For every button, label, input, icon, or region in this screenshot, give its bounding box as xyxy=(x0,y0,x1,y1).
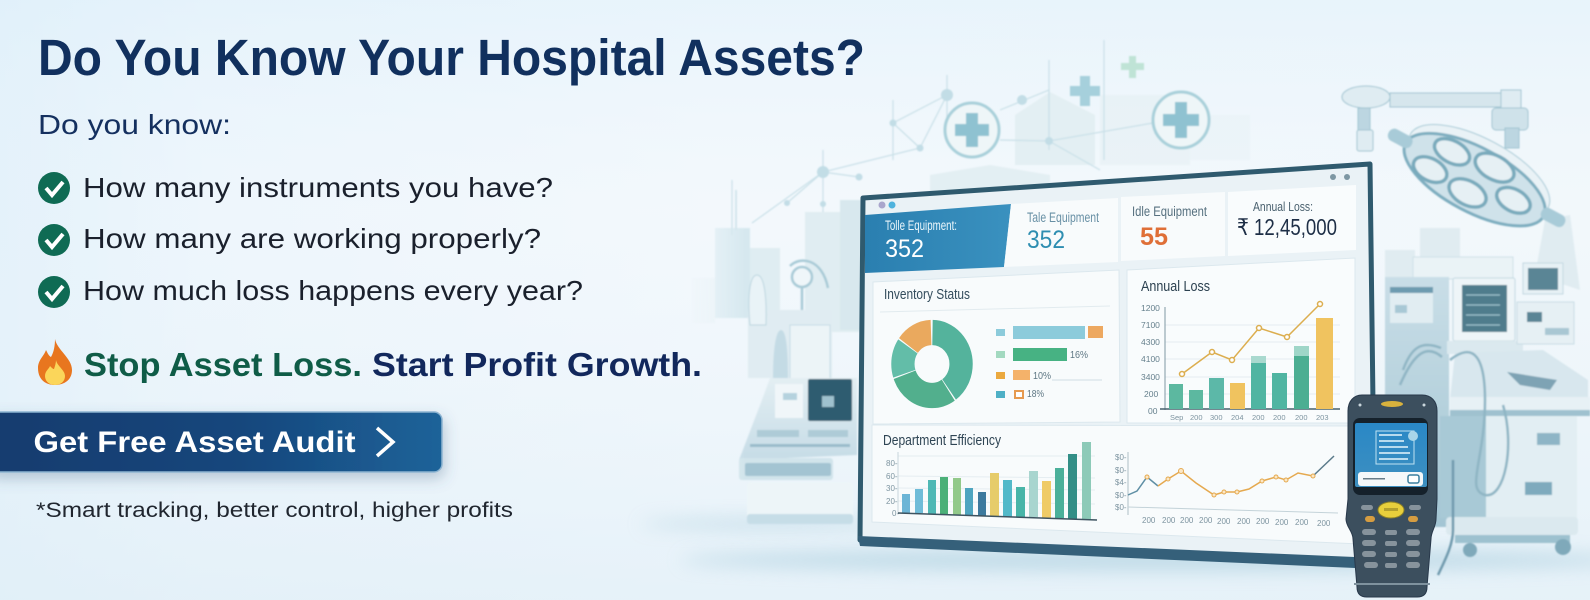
hospital silhouettes xyxy=(930,92,1250,200)
heading: Annual Loss xyxy=(1141,278,1210,295)
year labels: 300 xyxy=(1210,413,1223,422)
axis labels xyxy=(1141,303,1160,416)
line chart: 200 xyxy=(1199,516,1213,525)
axis labels: 4300 xyxy=(1141,337,1160,347)
donut chart xyxy=(903,332,961,396)
line chart: 200 xyxy=(1237,517,1251,526)
main monitor xyxy=(1453,278,1515,341)
line chart: $0- xyxy=(1115,503,1127,512)
dashboard monitor xyxy=(858,164,1378,569)
yellow scan button xyxy=(1378,502,1404,518)
checklist item 2: How many are working properly? xyxy=(83,223,541,254)
axis labels: 0- xyxy=(892,509,899,518)
legend bars xyxy=(996,326,1103,400)
bar chart xyxy=(1169,318,1333,409)
title: Do You Know Your Hospital Assets? xyxy=(38,29,865,86)
year labels xyxy=(1170,413,1329,422)
panel: inventory status xyxy=(873,270,1120,424)
stat card: annual loss xyxy=(1228,185,1356,256)
axis labels: 30- xyxy=(886,484,898,493)
screen xyxy=(1353,418,1428,495)
line chart: $0- xyxy=(1115,491,1127,500)
subheading: Do you know: xyxy=(38,109,231,140)
tagline xyxy=(84,346,702,383)
year labels: 200 xyxy=(1252,413,1265,422)
panel: annual loss xyxy=(1127,258,1355,423)
line chart: 200 xyxy=(1256,517,1270,526)
axis labels: 00 xyxy=(1148,406,1158,416)
year labels: 200 xyxy=(1190,413,1203,422)
tagline: Start Profit Growth. xyxy=(372,346,702,383)
equipment behind device xyxy=(748,310,832,378)
button: get free asset audit: Get Free Asset Audit xyxy=(34,426,356,459)
cart xyxy=(1440,416,1577,518)
line chart xyxy=(1115,452,1338,528)
year labels: 203 xyxy=(1316,413,1329,422)
monitor bezel xyxy=(860,164,1375,563)
axis labels xyxy=(886,459,899,518)
heading: Department Efficiency xyxy=(883,432,1001,449)
surgical lamp head xyxy=(1373,97,1583,255)
line chart: $0- xyxy=(1115,466,1127,475)
surgical lamp arm xyxy=(1342,86,1528,151)
scan trigger xyxy=(1381,401,1403,407)
right medical equipment xyxy=(1342,86,1590,575)
line chart: $0- xyxy=(1115,453,1127,462)
heading: Inventory Status xyxy=(884,287,970,303)
city silhouette right xyxy=(1385,215,1580,290)
line chart: 200 xyxy=(1142,516,1156,525)
axis labels: 4100 xyxy=(1141,354,1160,364)
icon: small green plus xyxy=(1121,56,1144,78)
stat card: idle equipment: Idle Equipment xyxy=(1132,204,1207,219)
axis labels: 7100 xyxy=(1141,320,1160,330)
icon: chevron xyxy=(377,428,393,456)
axis labels: 60- xyxy=(886,472,898,481)
stat card: total equipment highlighted: Tolle Equipment: xyxy=(885,218,957,233)
line chart: $4- xyxy=(1115,478,1127,487)
city and left medical device xyxy=(715,190,860,524)
legend bars: 18% xyxy=(1027,389,1044,400)
keypad xyxy=(1361,505,1421,568)
bar chart xyxy=(902,442,1091,519)
axis labels: 3400 xyxy=(1141,372,1160,382)
stat card: idle equipment: 55 xyxy=(1140,223,1168,251)
line chart: 200 xyxy=(1180,516,1194,525)
icon: small plus xyxy=(1070,76,1100,106)
checklist item 3: How much loss happens every year? xyxy=(83,275,583,306)
year labels: Sep xyxy=(1170,413,1183,422)
stat card: annual loss: Annual Loss: xyxy=(1253,199,1313,214)
tagline: Stop Asset Loss. xyxy=(84,346,362,383)
legend bars: 10% xyxy=(1033,371,1051,382)
line chart: 200 xyxy=(1275,518,1289,527)
line chart: 200 xyxy=(1317,519,1331,528)
year labels: 200 xyxy=(1273,413,1286,422)
left buildings xyxy=(715,190,860,332)
left device xyxy=(739,378,857,524)
stat card: idle equipment xyxy=(1121,192,1225,261)
stat card: annual loss: ₹ 12,45,000 xyxy=(1237,214,1337,240)
anesthesia machine body xyxy=(1385,257,1590,575)
icon: flame xyxy=(38,339,72,385)
line chart: 200 xyxy=(1162,516,1176,525)
axis labels: 200 xyxy=(1144,389,1158,399)
stat card: total equipment: 352 xyxy=(1027,226,1065,254)
monitor bottom edge xyxy=(858,536,1378,569)
line series xyxy=(1180,302,1322,376)
small top monitor xyxy=(1523,263,1563,294)
stat card: total equipment highlighted: 352 xyxy=(885,235,924,263)
stat card: total equipment: Tale Equipment xyxy=(1027,210,1099,225)
window dots xyxy=(878,174,1350,208)
checklist item 1: How many instruments you have? xyxy=(83,172,553,203)
icon: plus ring left xyxy=(945,103,999,157)
axis labels: 1200 xyxy=(1141,303,1160,313)
footnote: *Smart tracking, better control, higher profits xyxy=(36,498,513,522)
axis labels: 20- xyxy=(886,497,898,506)
icon: handheld barcode scanner xyxy=(1346,395,1437,597)
cables xyxy=(1400,345,1508,495)
checklist xyxy=(38,172,583,308)
stat card: total equipment highlighted xyxy=(865,204,1011,273)
icon: plus ring right xyxy=(1153,92,1209,148)
stethoscope stand xyxy=(790,261,828,320)
button: get free asset audit xyxy=(0,412,442,472)
legend bars: 16% xyxy=(1070,350,1088,361)
keyboard xyxy=(1450,350,1588,400)
stat card: total equipment xyxy=(1004,198,1118,267)
line chart: 200 xyxy=(1295,518,1309,527)
panel: department efficiency xyxy=(872,425,1360,544)
year labels: 200 xyxy=(1295,413,1308,422)
year labels: 204 xyxy=(1231,413,1244,422)
axis labels: 80- xyxy=(886,459,898,468)
network background with medical crosses xyxy=(732,40,1250,235)
line chart: 200 xyxy=(1217,517,1231,526)
